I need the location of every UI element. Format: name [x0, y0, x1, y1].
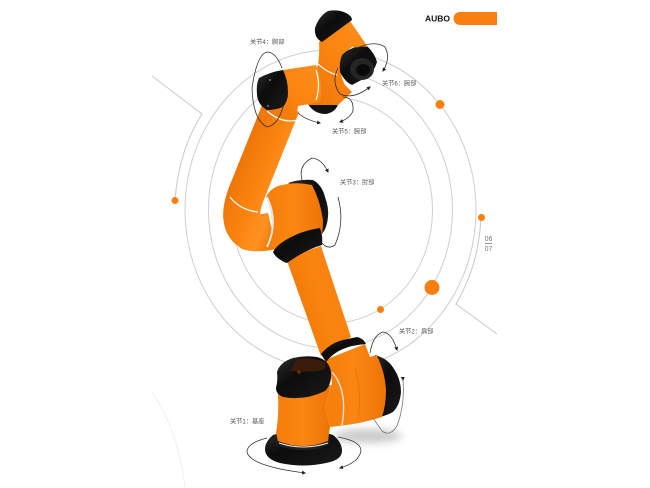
joint 6 black cap [340, 47, 377, 85]
orbit dots [172, 100, 485, 313]
joint labels: 关节5：腕部 [332, 128, 366, 136]
elbow silver ring [267, 197, 273, 247]
wrist black underside [308, 104, 338, 114]
shoulder body [325, 344, 386, 427]
page numbers 06/07: 07 [485, 246, 492, 253]
right bracket line with arc [456, 217, 497, 334]
joint labels: 关节4：腕部 [250, 38, 284, 46]
robot arm [230, 10, 402, 465]
joint labels [230, 38, 433, 426]
base white trim [279, 443, 328, 447]
elbow body [266, 183, 323, 263]
wrist rings [267, 47, 353, 121]
shoulder silver ring [332, 372, 344, 425]
joint labels: 关节1：基座 [230, 418, 264, 426]
brand pill [454, 12, 497, 25]
lower arm [286, 246, 351, 356]
shoulder fold line [355, 368, 359, 420]
elbow black collar [273, 228, 322, 263]
rotation arrows [247, 44, 403, 473]
joint labels: 关节6：腕部 [382, 80, 416, 88]
joint labels: 关节3：肘部 [340, 178, 374, 186]
base top black cap [276, 356, 331, 398]
joint labels: 关节2：肩部 [399, 328, 433, 336]
wrist link [308, 21, 368, 105]
elbow black cap [288, 180, 328, 234]
horizontal link [266, 65, 321, 120]
lower black collar [321, 337, 366, 362]
faint lower-left arc [152, 392, 185, 487]
base foot [265, 430, 342, 466]
top black cap [315, 10, 352, 42]
page numbers 06/07 [485, 236, 492, 253]
page numbers 06/07: 06 [485, 236, 492, 243]
shoulder right cap [373, 355, 401, 418]
concentric orbit rings [185, 50, 476, 370]
joint 4 black cap [257, 70, 288, 110]
base orange body [276, 385, 331, 446]
brand label: AUBO: AUBO [425, 14, 450, 24]
base shadow [334, 429, 402, 443]
left bracket line with arc [152, 76, 202, 200]
upper arm white ring [230, 197, 258, 212]
upper arm with bend [242, 105, 282, 233]
